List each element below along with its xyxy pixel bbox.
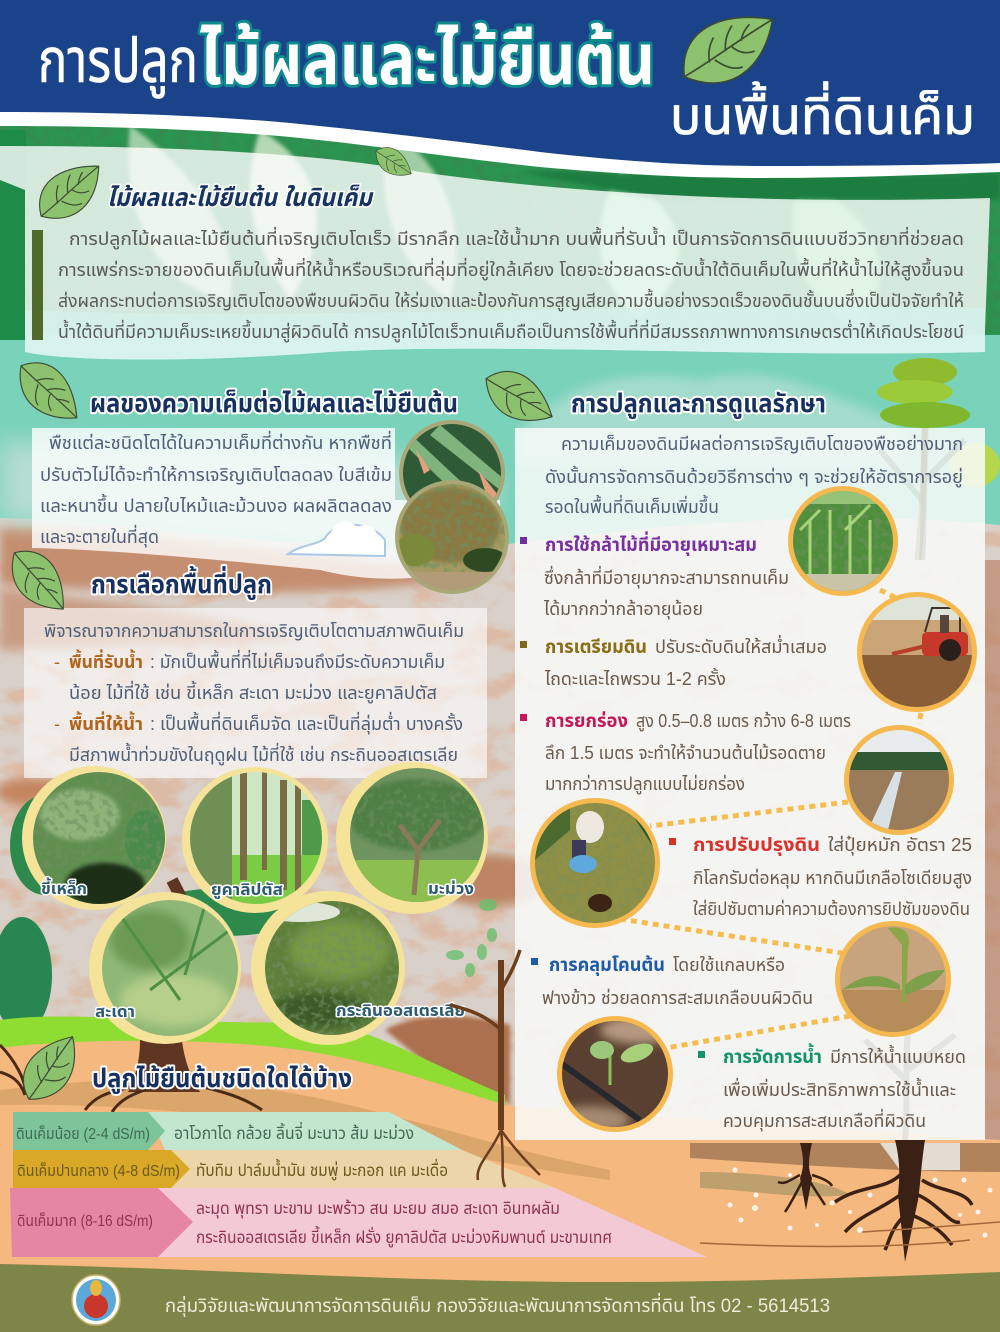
text: water management: มีการให้น้ำแบบหยด [830,1044,966,1067]
text: site selection: - [54,652,60,672]
heading: which perennial trees: ปลูกไม้ยืนต้นชนิดใดได้บ้าง [92,1063,352,1094]
text: soil amendment: การปรับปรุงดิน [693,835,820,856]
header band [0,0,1000,178]
text: soil amendment [669,835,972,919]
text: salinity effects: พืชแต่ละชนิดโตได้ในความเค็มที่ต่างกัน หากพืชที่ [49,430,392,453]
photo: acacia: กระถินออสเตรเลีย [336,1003,465,1020]
panel: salinity effects background [32,428,500,579]
title: ไม้ผลและไม้ยืนต้น [200,20,655,100]
text: site selection [44,621,464,767]
title [38,20,975,146]
text: mulching: การคลุมโคนต้น [549,954,665,976]
text: soil amendment: กิโลกรัมต่อหลุม หากดินมีเกลือโซเดียมสูง [693,868,972,890]
text: site selection: พื้นที่ให้น้ำ [69,711,143,734]
text: site selection: น้อย ไม้ที่ใช้ เช่น ขี้เหล็ก สะเดา มะม่วง และยูคาลิปตัส [69,680,437,705]
text: planting introduction: ดังนั้นการจัดการดินด้วยวิธีการต่าง ๆ จะช่วยให้อัตราการอยู่ [545,465,963,489]
text: raised beds: การยกร่อง [545,710,628,732]
photo: seedlings [788,486,898,596]
background: teal sky [0,330,1000,555]
text: raised beds: ลึก 1.5 เมตร จะทำให้จำนวนต้นไม้รอดตาย [545,743,826,763]
row: high salinity [10,1188,707,1257]
row: high salinity: ละมุด พุทรา มะขาม มะพร้าว สน มะยม สมอ สะเดา อินทผลัม [196,1198,560,1219]
icon: effects leaf [20,361,77,420]
illustration: small tree center [450,950,540,1187]
text: seedling age: ได้มากกว่ากล้าอายุน้อย [543,599,703,620]
heading: effects of salinity: ผลของความเค็มต่อไม้ผลและไม้ยืนต้น [90,388,458,418]
photo: khilek [22,766,170,910]
footer band [0,1264,1000,1332]
text: raised beds [520,710,851,796]
illustration: cloud [288,521,385,556]
text: site selection: : มักเป็นพื้นที่ที่ไม่เค็มจนถึงมีระดับความเค็ม [150,649,445,672]
text: water management: เพื่อเพิ่มประสิทธิภาพการใช้น้ำและ [723,1077,956,1100]
text: seedling age: การใช้กล้าไม้ที่มีอายุเหมาะสม [545,531,757,556]
illustration: small tree leaves [446,899,497,977]
text: seedling age [520,531,789,620]
icon: tree species leaf [17,1037,82,1101]
photo: neem [89,892,241,1044]
text: site selection: มีสภาพน้ำท่วมขังในฤดูฝน ไม้ที่ใช้ เช่น กระถินออสเตรเลีย [69,742,458,767]
photo: mulched plant [835,921,951,1037]
text: introduction: ส่งผลกระทบต่อการเจริญเติบโตของพืชบนผิวดิน ให้ร่มเงาและป้องกันการสูญเสียความชื้นอย่างรวดเร็วของดินชั้นบนซึ่งเป็นปัจจัยทำให้ [58,288,964,313]
row: moderate salinity: ทับทิม ปาล์มน้ำมัน ชมพู่ มะกอก แค มะเดื่อ [196,1158,448,1182]
text: introduction [58,226,964,344]
text: seedling age: ซึ่งกล้าที่มีอายุมากจะสามารถทนเค็ม [544,565,789,589]
text: introduction: การแพร่กระจายของดินเค็มในพื้นที่ให้น้ำหรือบริเวณที่ลุ่มที่อยู่ใกล้เคียง โดยจะช่วยลดระดับน้ำใต้ดินเค็มในพื้นที่ให้น้ำไม่ให้สูงขึ้นจน [58,257,964,282]
row: low salinity: อาโวกาโด กล้วย ลิ้นจี่ มะนาว ส้ม มะม่วง [174,1121,414,1143]
text: introduction: น้ำใต้ดินที่มีความเค็มระเหยขึ้นมาสู่ผิวดินได้ การปลูกไม้โตเร็วทนเค็มถือเป็นการใช้พื้นที่ที่มีสมรรถภาพทางการเกษตรต่ำให้เกิดประโยชน์ [58,319,964,344]
footer text: กลุ่มวิจัยและพัฒนาการจัดการดินเค็ม กองวิจัยและพัฒนาการจัดการที่ดิน โทร 02 - 5614513 [165,1292,830,1317]
text: site selection: - [54,714,60,734]
illustration: tree top right [877,358,1000,560]
text: salinity effects: และหนาขึ้น ปลายใบไหม้และม้วนงอ ผลผลิตลดลง [40,493,392,516]
text: soil amendment: ใส่ยิปซัมตามค่าความต้องการยิปซัมของดิน [693,899,970,919]
heading: site selection: การเลือกพื้นที่ปลูก [91,566,272,600]
text: salinity effects: ปรับตัวไม่ได้จะทำให้การเจริญเติบโตลดลง ใบสีเข้ม [40,465,392,485]
title: การปลูก [38,27,198,99]
row: low salinity [13,1112,462,1150]
row: low salinity: ดินเค็มน้อย (2-4 dS/m) [16,1125,150,1143]
text: soil preparation [520,634,827,689]
icon: intro leaf [39,162,99,221]
icon: title leaf [681,3,773,94]
text: salinity effects [40,430,392,548]
title: บนพื้นที่ดินเค็ม [670,81,975,146]
text: planting introduction [545,434,963,517]
text: site selection: : เป็นพื้นที่ดินเค็มจัด และเป็นที่ลุ่มต่ำ บางครั้ง [150,711,463,735]
photo: salt stressed shrub [395,480,510,597]
text: site selection: พื้นที่รับน้ำ [69,649,143,672]
text: raised beds: มากกว่าการปลูกแบบไม่ยกร่อง [545,774,745,796]
text: soil preparation: ไถดะและไถพรวน 1-2 ครั้ง [544,667,726,689]
text: raised beds: สูง 0.5–0.8 เมตร กว้าง 6-8 เมตร [636,711,851,733]
text: salinity effects: และจะตายในที่สุด [40,524,159,548]
text: planting introduction: รอดในพื้นที่ดินเค็มเพิ่มขึ้น [545,494,719,517]
background: leaves photo [0,120,1000,340]
icon: small leaf [375,143,411,180]
illustration: ground [0,1017,1000,1290]
text: water management [698,1043,966,1132]
text: water management: การจัดการน้ำ [723,1043,822,1068]
logo [72,1275,120,1325]
panel: introduction [0,143,990,360]
text: soil preparation: ปรับระดับดินให้สม่ำเสมอ [655,634,827,657]
row: high salinity: กระถินออสเตรเลีย ขี้เหล็ก ฝรั่ง ยูคาลิปตัส มะม่วงหิมพานต์ มะขามเทศ [196,1225,612,1249]
heading: fruit and perennial trees in saline soil: ไม้ผลและไม้ยืนต้น ในดินเค็ม [107,184,374,212]
heading: planting and care: การปลูกและการดูแลรักษา [571,388,826,419]
row: high salinity: ดินเค็มมาก (8-16 dS/m) [17,1212,153,1230]
photo: eucalyptus [182,767,328,913]
illustration: central trunk and roots [0,880,262,1112]
text: introduction: การปลูกไม้ผลและไม้ยืนต้นที่เจริญเติบโตเร็ว มีรากลึก และใช้น้ำมาก บนพื้นที่รับน้ำ เป็นการจัดการดินแบบชีววิทยาที่ช่วยลด [69,226,964,251]
photo: drip irrigation [557,1016,673,1132]
text: mulching: ฟางข้าว ช่วยลดการสะสมเกลือบนผิวดิน [542,988,813,1008]
text: mulching [531,954,813,1008]
row: moderate salinity [13,1150,555,1188]
photo: neem: สะเดา [95,1004,135,1021]
text: soil amendment: ใส่ปุ๋ยหมัก อัตรา 25 [828,835,972,856]
illustration: central tree crown [0,795,305,1033]
icon: site selection leaf [10,550,67,609]
icon: care leaf [484,362,552,431]
panel: planting and care background [515,428,985,1140]
dotted connectors [620,590,921,1048]
table: salinity classes [10,1112,707,1257]
text: soil preparation: การเตรียมดิน [545,637,647,658]
photo: tractor [857,592,977,712]
photo: raised beds [844,725,954,835]
photo: burned leaves [399,420,505,502]
text: planting introduction: ความเค็มของดินมีผลต่อการเจริญเติบโตของพืชอย่างมาก [561,434,963,454]
text: site selection: พิจารณาจากความสามารถในการเจริญเติบโตตามสภาพดินเค็ม [44,621,464,641]
panel: site selection background [24,608,487,778]
photo: khilek: ขี้เหล็ก [41,877,87,898]
photo: mango [336,762,488,914]
photo: eucalyptus: ยูคาลิปตัส [211,882,283,900]
row: moderate salinity: ดินเค็มปานกลาง (4-8 dS/m) [17,1162,180,1180]
text: water management: ควบคุมการสะสมเกลือที่ผิวดิน [723,1108,926,1132]
illustration: rooted trees with salt dots [700,1140,1000,1262]
photo: mango: มะม่วง [428,880,474,898]
photo: farmer applying compost [530,798,660,928]
photo: acacia [251,891,465,1045]
text: mulching: โดยใช้แกลบหรือ [673,955,785,975]
accent bar [32,230,43,340]
